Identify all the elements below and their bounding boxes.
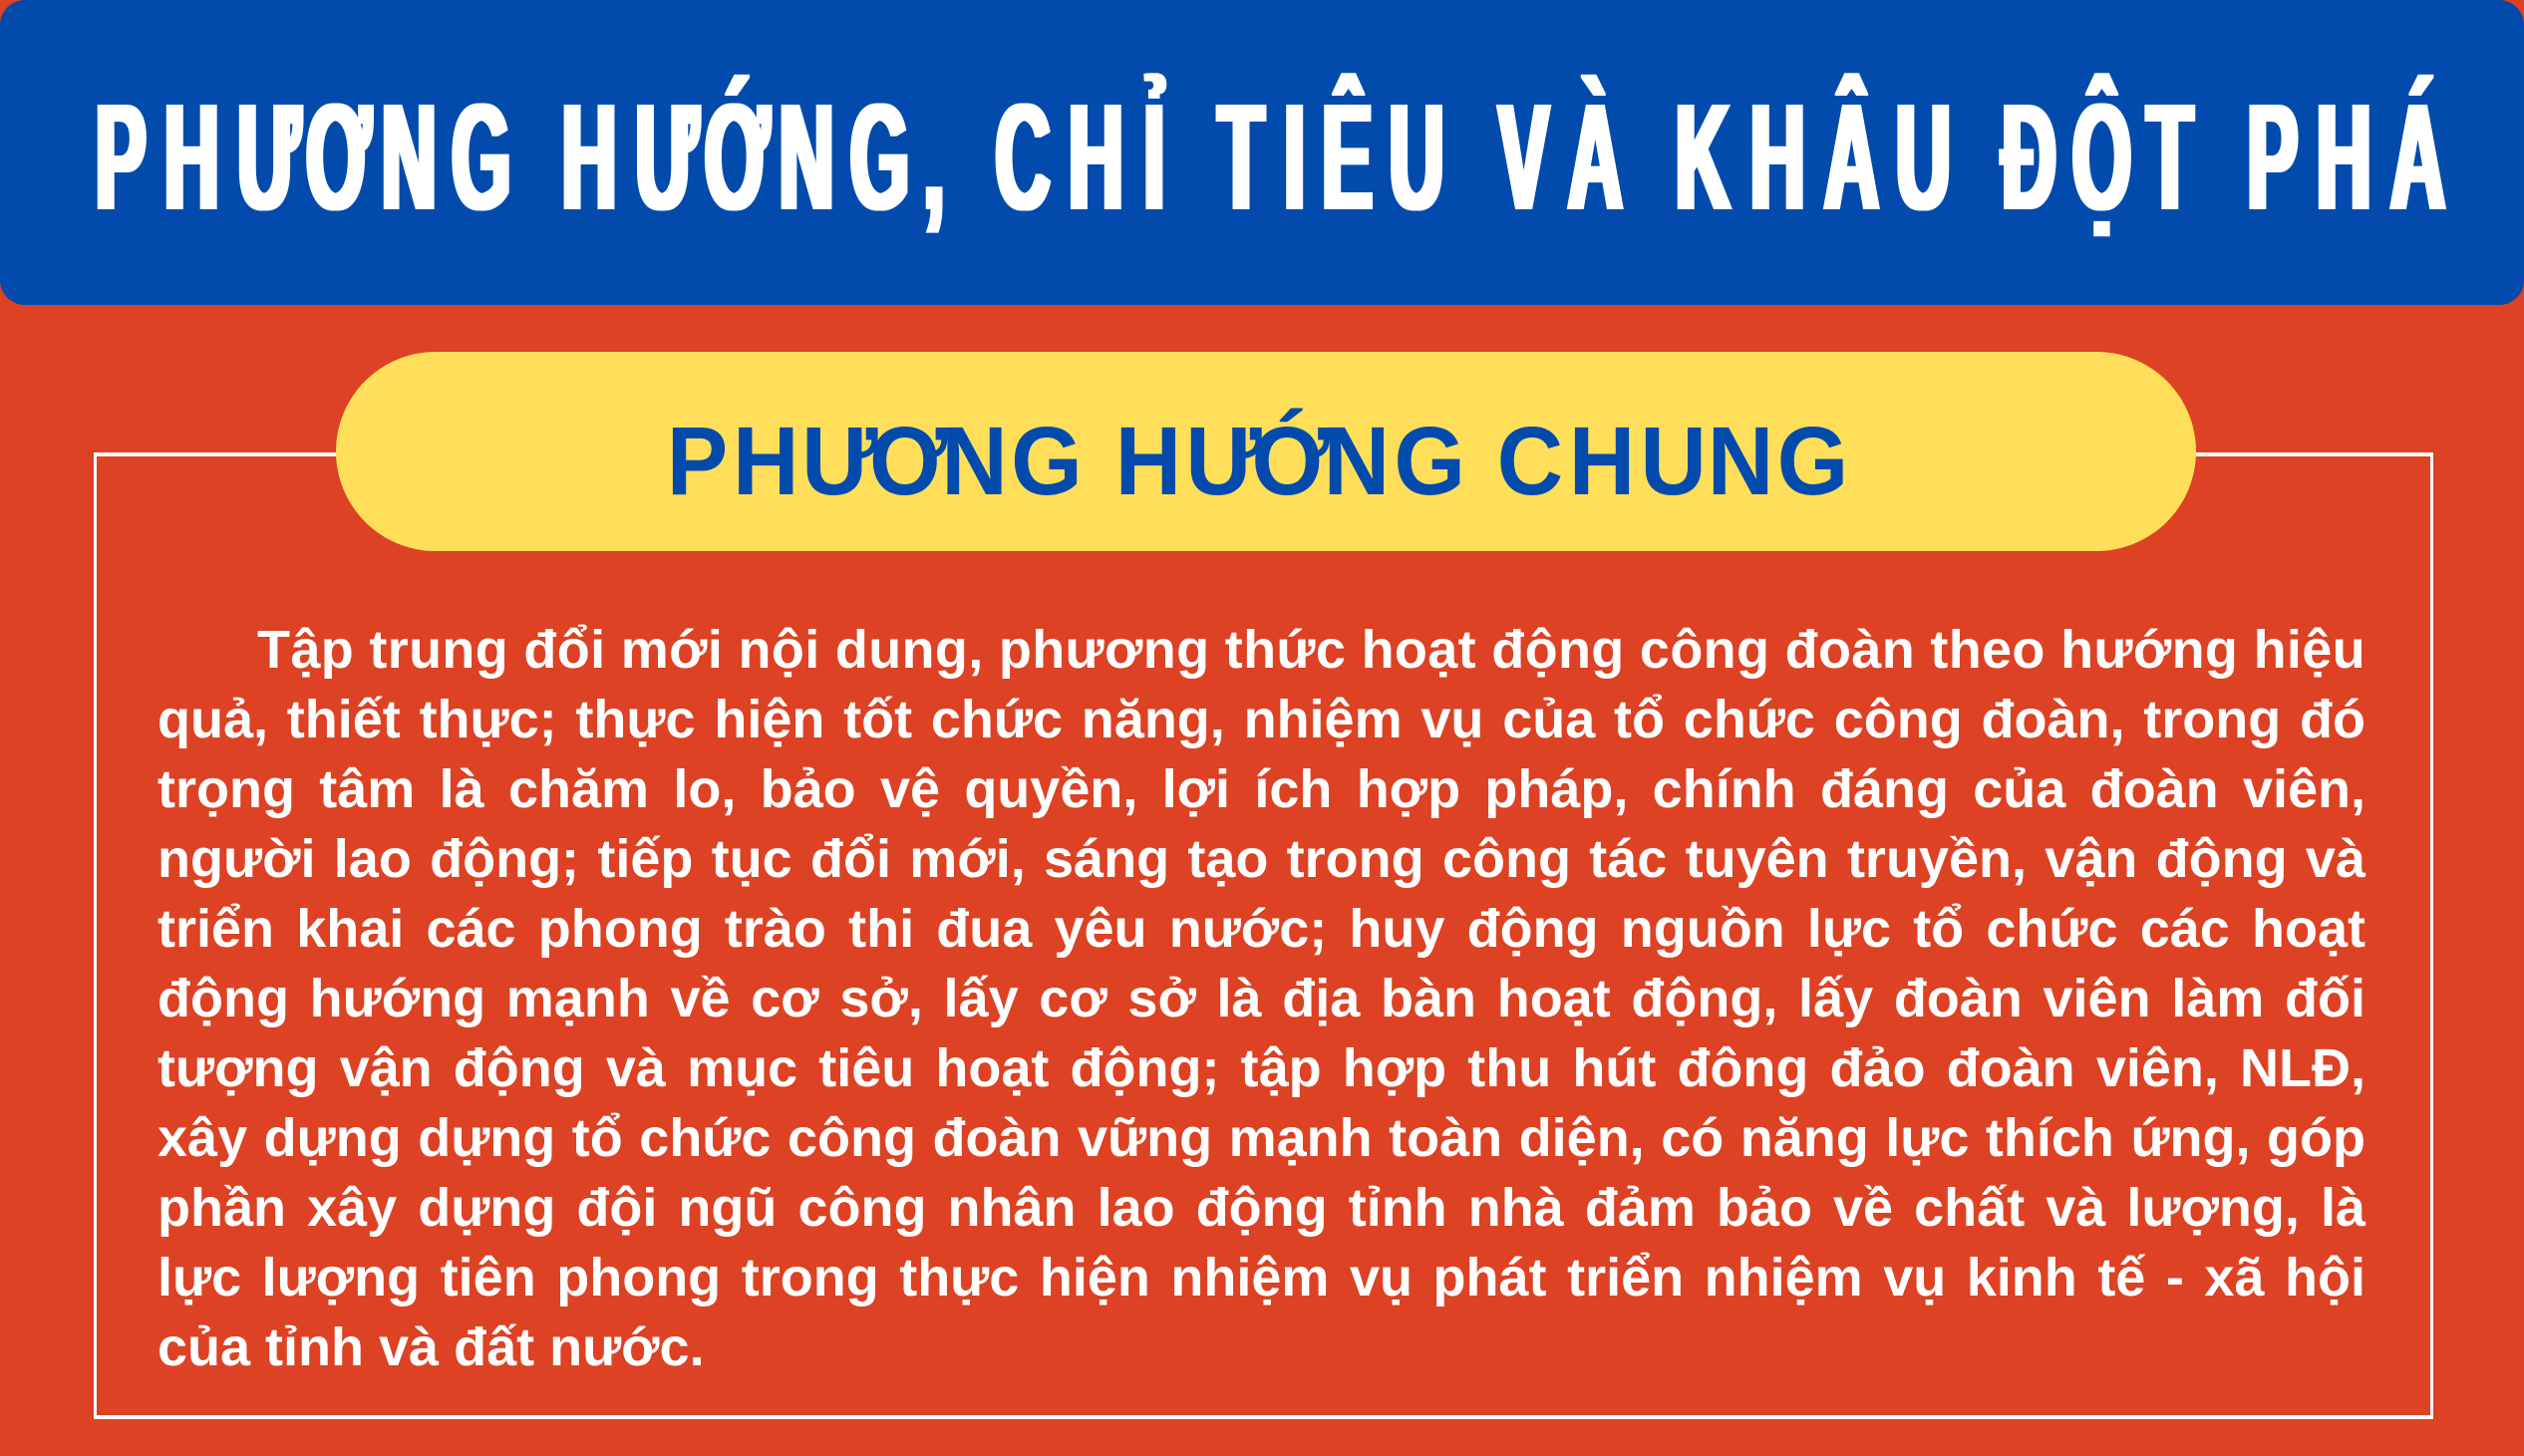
body paragraph: triển khai các phong trào thi đua yêu nước; huy động nguồn lực tổ chức các hoạt: [158, 899, 2366, 959]
heading: phương hướng chung: PHƯƠNG: [667, 408, 1083, 516]
body paragraph: [158, 620, 2366, 1377]
body paragraph: lực lượng tiên phong trong thực hiện nhiệm vụ phát triển nhiệm vụ kinh tế - xã hội: [158, 1248, 2366, 1308]
heading: phương hướng chung: HƯỚNG: [1115, 408, 1465, 516]
title text: ĐỘT: [2002, 72, 2193, 242]
title text: [96, 72, 2446, 242]
title text: PHÁ: [2247, 72, 2445, 242]
title text: HƯỚNG,: [562, 72, 945, 242]
heading: phương hướng chung: CHUNG: [1497, 408, 1848, 516]
body paragraph: của tỉnh và đất nước.: [158, 1317, 705, 1377]
body paragraph: tượng vận động và mục tiêu hoạt động; tập hợp thu hút đông đảo đoàn viên, NLĐ,: [158, 1038, 2366, 1098]
content frame: [94, 452, 2433, 1419]
heading pill: [336, 352, 2196, 551]
title banner: [0, 0, 2524, 305]
body paragraph: động hướng mạnh về cơ sở, lấy cơ sở là địa bàn hoạt động, lấy đoàn viên làm đối: [158, 969, 2366, 1028]
body paragraph: quả, thiết thực; thực hiện tốt chức năng, nhiệm vụ của tổ chức công đoàn, trong đó: [158, 690, 2366, 749]
body paragraph: trọng tâm là chăm lo, bảo vệ quyền, lợi ích hợp pháp, chính đáng của đoàn viên,: [158, 759, 2366, 819]
body paragraph: Tập trung đổi mới nội dung, phương thức hoạt động công đoàn theo hướng hiệu: [257, 620, 2366, 680]
body paragraph: xây dựng dựng tổ chức công đoàn vững mạnh toàn diện, có năng lực thích ứng, góp: [158, 1108, 2366, 1168]
title text: VÀ: [1498, 72, 1623, 242]
title text: CHỈ: [995, 72, 1164, 242]
title text: KHÂU: [1676, 72, 1951, 242]
title text: PHƯƠNG: [96, 72, 510, 242]
body paragraph: phần xây dựng đội ngũ công nhân lao động tỉnh nhà đảm bảo về chất và lượng, là: [158, 1178, 2366, 1238]
title text: TIÊU: [1218, 72, 1444, 242]
heading: phương hướng chung: [667, 408, 1848, 516]
body paragraph: người lao động; tiếp tục đổi mới, sáng tạo trong công tác tuyên truyền, vận động và: [158, 829, 2366, 889]
